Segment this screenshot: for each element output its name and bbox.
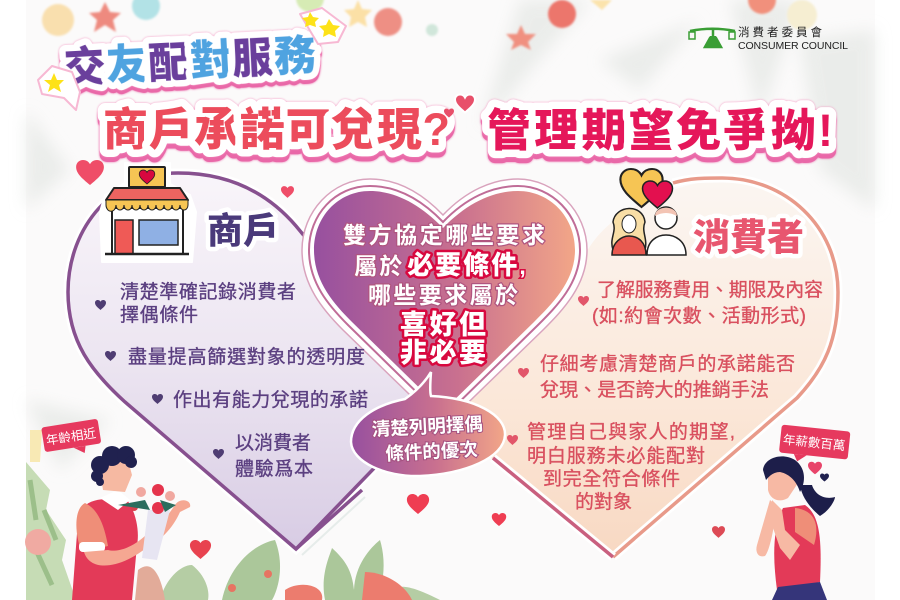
heading: consumer: 消費者 (693, 217, 804, 258)
centre text: 哪些要求屬於 (368, 282, 518, 308)
icon: store (100, 163, 196, 262)
consumer bullets (507, 279, 823, 513)
label: salary (778, 425, 850, 467)
woman (756, 425, 850, 600)
merchant bullets: 盡量提高篩選對象的透明度 (128, 346, 365, 368)
consumer bullets: 了解服務費用、期限及內容 (597, 279, 823, 301)
centre text: 非必要 (400, 338, 486, 368)
hearts by question mark (444, 94, 475, 118)
centre text (343, 222, 545, 368)
title left: 商戶承諾可兌現? (103, 104, 450, 155)
merchant bullets: 體驗爲本 (235, 458, 313, 480)
consumer bullets: 仔細考慮清楚商戶的承諾能否 (540, 353, 795, 375)
centre text: 雙方協定哪些要求 (343, 222, 545, 248)
logo: CONSUMER COUNCIL (738, 40, 848, 52)
merchant bullets: 以消費者 (235, 432, 311, 454)
heading: merchant: 商戶 (207, 210, 279, 251)
star cluster right (300, 8, 346, 44)
consumer bullets: 到完全符合條件 (543, 468, 680, 490)
label: age: 年齡相近 (45, 426, 97, 448)
subtitle badge: 交友配對服務 (63, 31, 317, 92)
panel: centre heart (302, 179, 587, 427)
speech bubble: 清楚列明擇偶 (371, 413, 483, 440)
panel: merchant heart (68, 173, 440, 555)
speech bubble (351, 372, 505, 476)
merchant bullets: 作出有能力兌現的承諾 (173, 389, 368, 411)
logo (689, 25, 848, 52)
consumer bullets: 管理自己與家人的期望, (527, 421, 735, 443)
consumer bullets: (如:約會次數、活動形式) (592, 305, 806, 327)
merchant bullets: 清楚準確記錄消費者 (120, 281, 296, 303)
consumer bullets: 明白服務未必能配對 (527, 445, 705, 467)
man with bouquet (41, 419, 190, 600)
consumer bullets: 的對象 (575, 491, 632, 513)
centre text: 喜好但 (400, 310, 486, 340)
title right: 管理期望免爭拗! (487, 105, 833, 156)
subtitle badge (38, 8, 346, 110)
speech bubble: 條件的優次 (385, 438, 479, 464)
ornaments top (42, 0, 817, 50)
label: age (41, 419, 102, 459)
consumer bullets: 兌現、是否誇大的推銷手法 (540, 379, 769, 401)
merchant bullets (95, 281, 368, 480)
star left (38, 66, 80, 110)
label: salary: 年薪數百萬 (782, 433, 846, 453)
panel: consumer heart (296, 178, 838, 557)
icon: couple (612, 169, 686, 255)
centre text: 屬於必要條件, (354, 250, 528, 280)
foliage bottom (25, 430, 440, 600)
logo: 消費者委員會 (738, 25, 822, 39)
merchant bullets: 擇偶條件 (120, 304, 198, 326)
floating hearts (76, 160, 725, 559)
